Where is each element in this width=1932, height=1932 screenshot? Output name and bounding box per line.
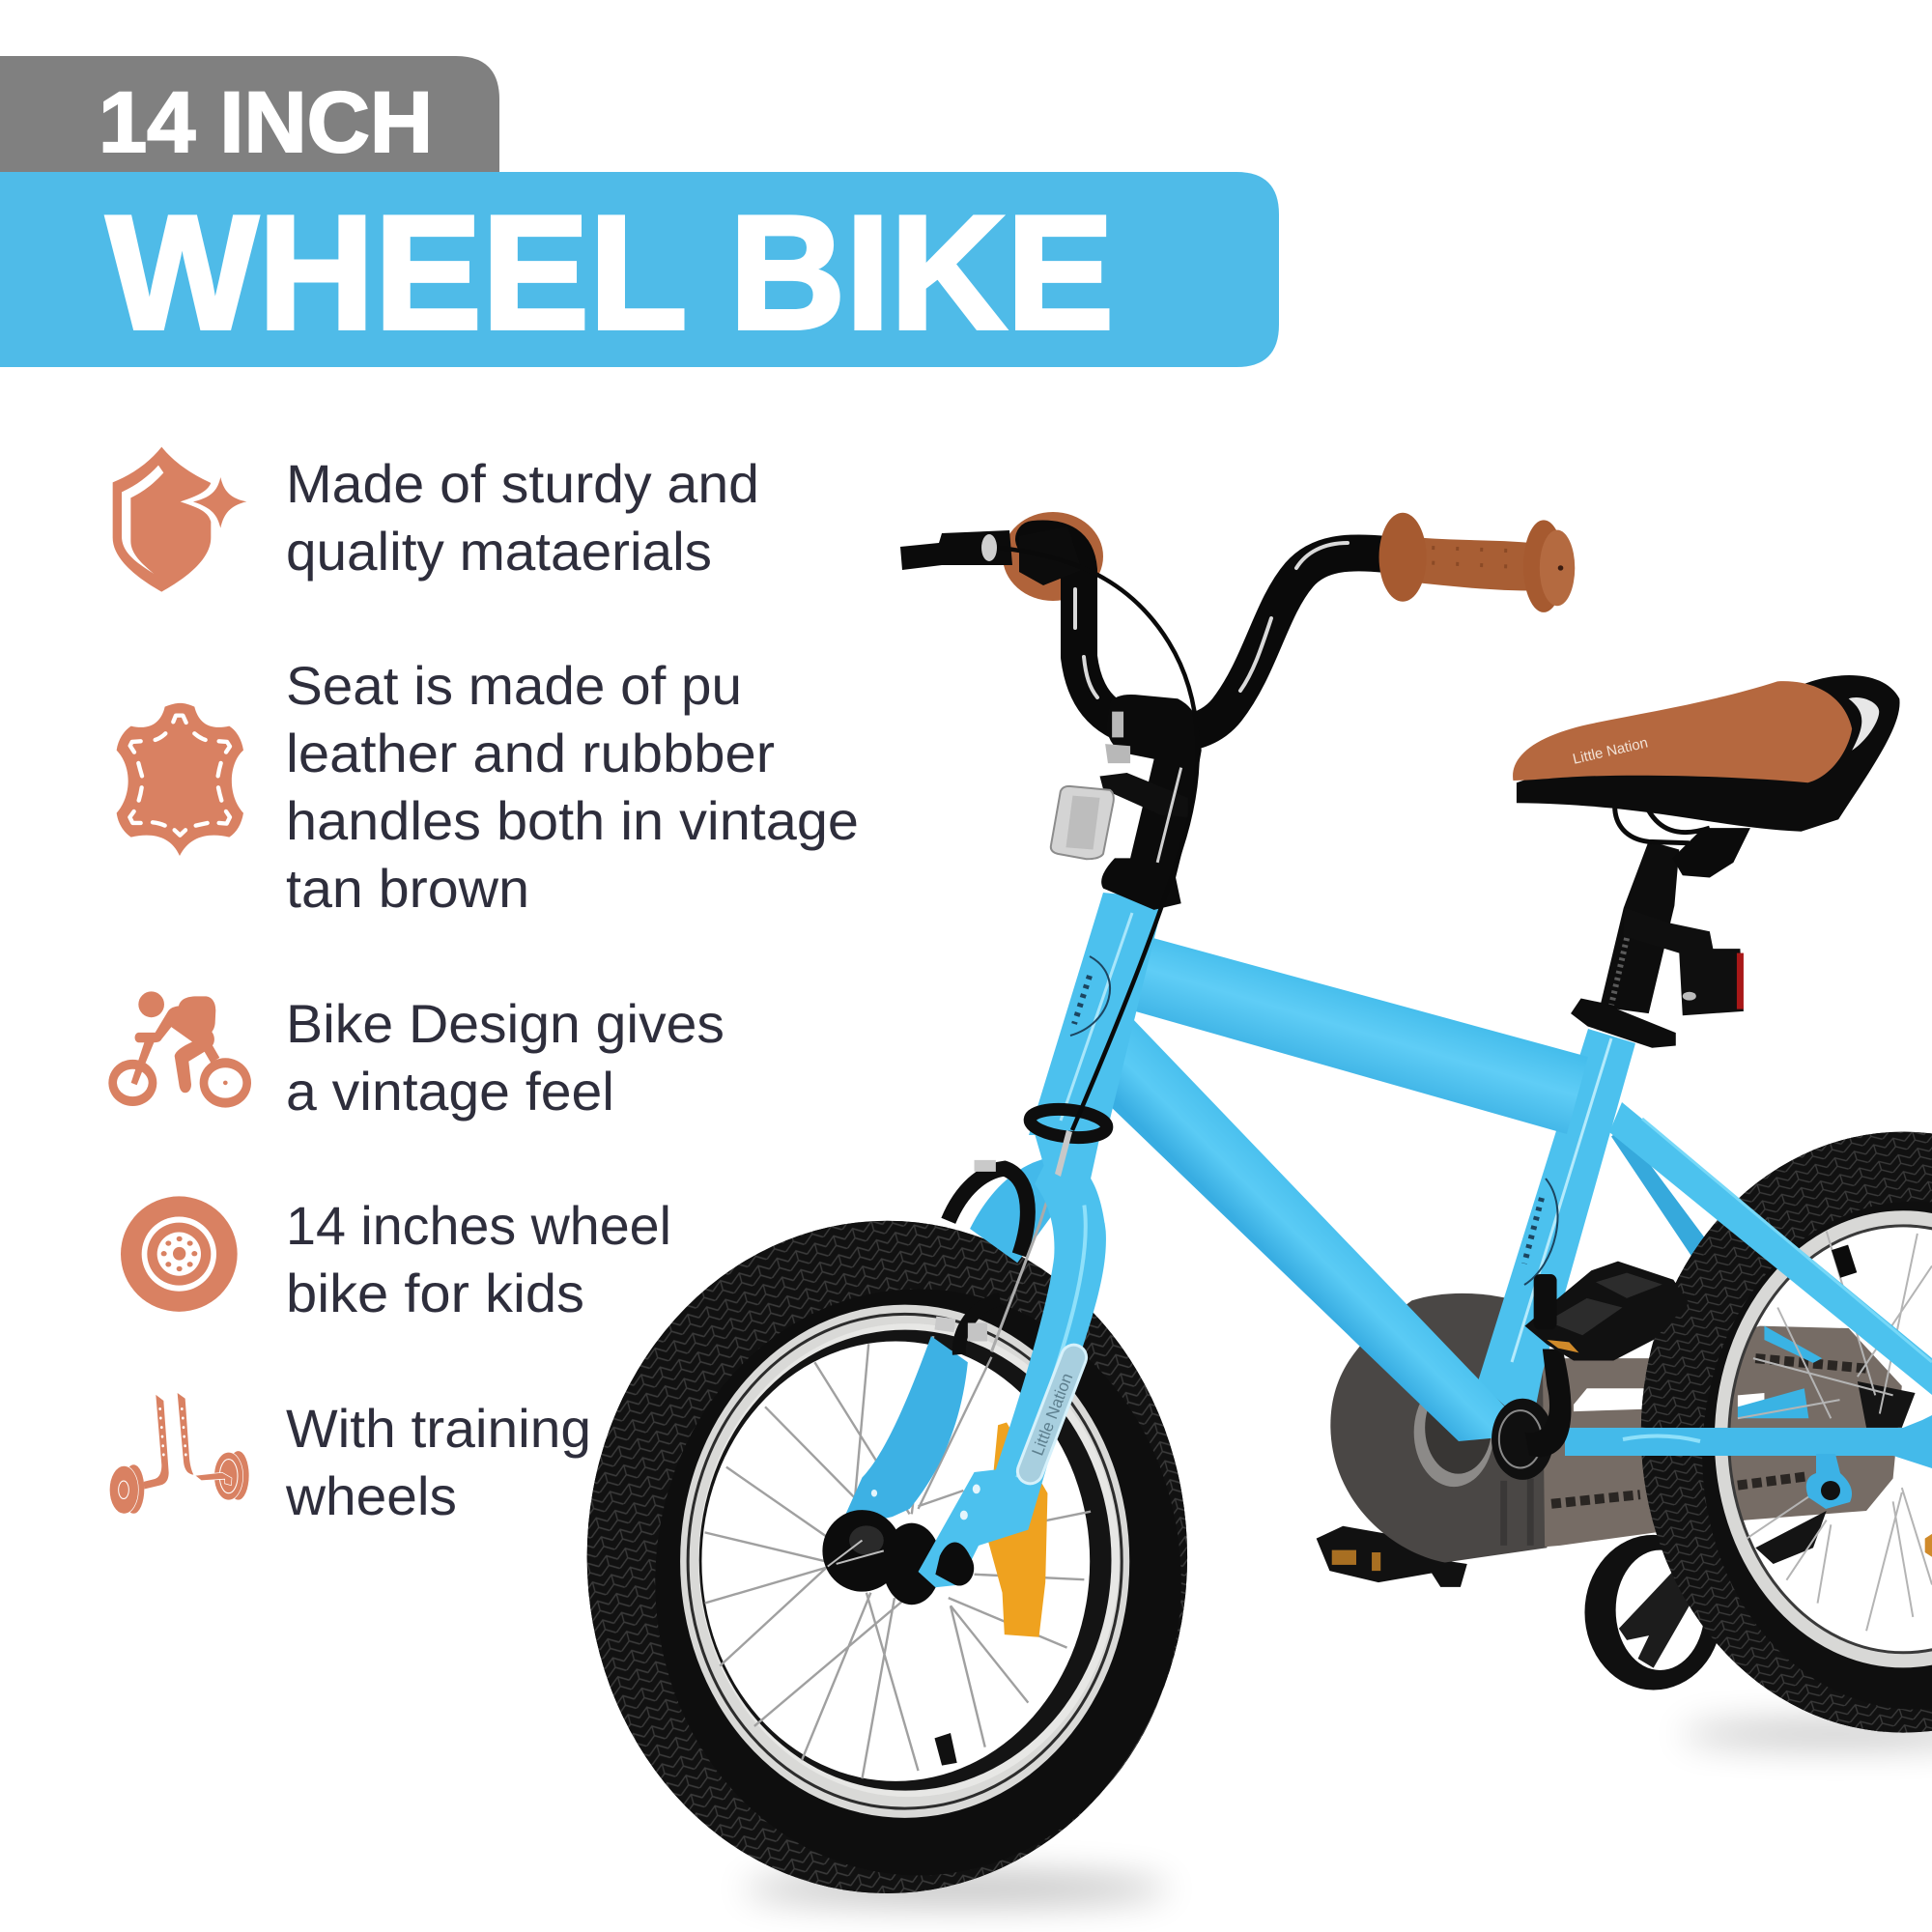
brake cable bbox=[998, 548, 1198, 1130]
brake lever bbox=[900, 530, 1012, 570]
feature: pu leather seat bbox=[117, 655, 859, 919]
brake pivot bbox=[968, 1323, 987, 1342]
right grip bbox=[1379, 513, 1575, 612]
chain guard bbox=[1330, 1293, 1916, 1564]
text: vintage design: a vintage feel bbox=[286, 1061, 614, 1122]
ground shadows bbox=[744, 1722, 1932, 1904]
feature: sturdy materials bbox=[113, 447, 759, 592]
saddle base bbox=[1517, 675, 1900, 832]
front wheel assembly bbox=[587, 1132, 1187, 1893]
head tube bbox=[1029, 893, 1164, 1135]
icon: shield with sparkle bbox=[113, 447, 246, 592]
crank arm bbox=[1536, 1349, 1571, 1457]
icon: child on bike bbox=[113, 991, 247, 1103]
header banner: wheel bike: WHEEL BIKE bbox=[106, 182, 1114, 363]
training wheel bbox=[1584, 1535, 1722, 1690]
head clamp ring bbox=[1029, 1106, 1108, 1177]
text: vintage design: Bike Design gives bbox=[286, 993, 724, 1054]
top tube bbox=[1125, 937, 1588, 1134]
rear triangle stays bbox=[1565, 1102, 1932, 1509]
fork label: Little Nation bbox=[1029, 1371, 1076, 1458]
text: sturdy materials: quality mataerials bbox=[286, 521, 712, 582]
text: pu leather seat: handles both in vintage bbox=[286, 790, 859, 851]
stem and headset bbox=[1051, 695, 1202, 910]
hub bbox=[822, 1510, 941, 1605]
near pedal bbox=[1524, 1262, 1689, 1361]
handlebar bbox=[1034, 538, 1386, 734]
bicycle illustration bbox=[587, 512, 1932, 1904]
lever clamp highlight bbox=[981, 534, 997, 561]
rear tyre bbox=[1641, 1132, 1932, 1733]
feature: training wheels bbox=[109, 1393, 591, 1526]
fork highlight bbox=[1017, 1206, 1086, 1477]
text: training wheels: With training bbox=[286, 1398, 591, 1459]
text: 14 inch wheel: bike for kids bbox=[286, 1263, 584, 1323]
front reflector bbox=[1051, 786, 1114, 859]
fork label bbox=[1014, 1341, 1090, 1488]
text: pu leather seat: tan brown bbox=[286, 858, 529, 919]
rear fork blade bbox=[837, 1336, 968, 1535]
saddle rails and clamp bbox=[1615, 807, 1750, 877]
seat tube bbox=[1478, 1029, 1635, 1430]
rear reflector on chain stay bbox=[1925, 1534, 1932, 1557]
fork neck bbox=[1034, 1130, 1101, 1183]
dropout bolts bbox=[871, 1485, 980, 1520]
saddle and seatpost bbox=[1513, 675, 1900, 1048]
lever clamp bbox=[1019, 526, 1082, 585]
rear rim and spokes bbox=[1721, 1217, 1932, 1661]
spokes over hub bbox=[828, 1541, 884, 1567]
axle nut bbox=[935, 1543, 974, 1586]
spokes bbox=[705, 1336, 1091, 1778]
bottom bracket bbox=[1492, 1399, 1553, 1480]
seatpost bbox=[1571, 841, 1679, 1048]
icon: training wheels bbox=[109, 1393, 249, 1514]
icon: leather hide bbox=[117, 703, 243, 856]
brake caliper arms bbox=[935, 1132, 1069, 1354]
header tab: 14 inch: 14 INCH bbox=[99, 73, 433, 170]
left grip bbox=[1003, 512, 1103, 601]
front tyre bbox=[587, 1221, 1187, 1893]
feature: vintage design bbox=[113, 991, 724, 1122]
text: sturdy materials: Made of sturdy and bbox=[286, 453, 759, 514]
far seat stay bbox=[1611, 1135, 1704, 1256]
text: 14 inch wheel: 14 inches wheel bbox=[286, 1195, 671, 1256]
front rim bbox=[680, 1305, 1129, 1818]
fork crown rear bbox=[970, 1158, 1052, 1263]
header tab: 14 inch bbox=[0, 56, 499, 172]
valve stem bbox=[934, 1733, 957, 1766]
feature: 14 inch wheel bbox=[121, 1195, 671, 1323]
rear reflector bbox=[1623, 908, 1744, 1015]
saddle tan top bbox=[1513, 681, 1852, 782]
rear section behind frame bbox=[1317, 1127, 1932, 1733]
saddle brand: Little Nation bbox=[1571, 734, 1649, 768]
frame bbox=[1029, 893, 1932, 1509]
text: pu leather seat: Seat is made of pu bbox=[286, 655, 742, 716]
text: training wheels: wheels bbox=[285, 1465, 457, 1526]
far pedal bbox=[1317, 1526, 1467, 1587]
crank and near pedal bbox=[1492, 1262, 1932, 1557]
icon: wheel bbox=[121, 1196, 238, 1312]
down tube bbox=[1113, 1020, 1505, 1441]
front fork blade bbox=[919, 1157, 1106, 1587]
orange reflector bbox=[987, 1423, 1047, 1637]
text: pu leather seat: leather and rubbber bbox=[286, 723, 775, 783]
